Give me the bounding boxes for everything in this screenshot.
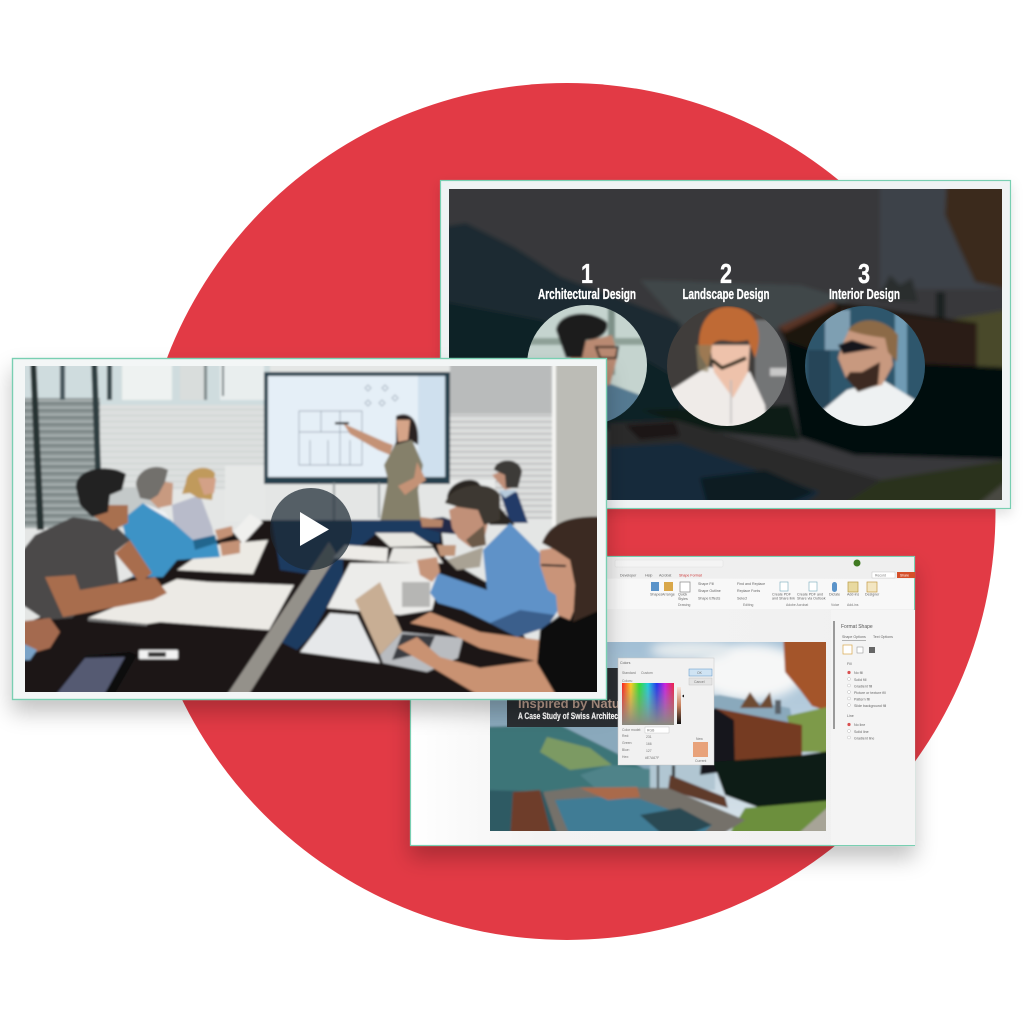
format shape pane: Gradient fill bbox=[854, 684, 872, 688]
number 1 and heading bbox=[538, 258, 636, 303]
format shape pane: Solid line bbox=[854, 730, 869, 734]
conference table bbox=[25, 518, 535, 692]
colors dialog: Red: bbox=[622, 734, 629, 738]
format shape pane: Solid fill bbox=[854, 678, 867, 682]
colors dialog: RGB bbox=[647, 728, 655, 732]
tablet bbox=[56, 652, 136, 692]
ribbon toolbar: Create PDF and bbox=[797, 592, 823, 596]
number 1 and heading: Architectural Design bbox=[538, 286, 636, 303]
panel: dark slide with three design disciplines bbox=[435, 175, 1020, 515]
colors dialog: 166 bbox=[646, 742, 652, 746]
ribbon tabs bbox=[600, 557, 915, 578]
format shape pane: Fill bbox=[847, 662, 852, 666]
man in grey t-shirt bbox=[15, 468, 167, 620]
ribbon tabs: Shape Format bbox=[679, 574, 702, 578]
slide title band: Inspired by Nature bbox=[518, 696, 632, 711]
laptop bbox=[355, 582, 463, 672]
play button bbox=[270, 488, 352, 570]
ribbon toolbar: Designer bbox=[865, 592, 880, 596]
number 2 and heading bbox=[682, 258, 770, 303]
colors dialog: 127 bbox=[646, 749, 652, 753]
ribbon tabs: Share bbox=[900, 574, 909, 578]
ribbon toolbar: Shape Effects bbox=[698, 596, 721, 600]
ribbon toolbar bbox=[600, 579, 914, 609]
ribbon toolbar: Shapes bbox=[650, 592, 662, 596]
darkened slide photo background bbox=[449, 189, 1002, 500]
colors dialog: Color model: bbox=[622, 728, 641, 732]
format shape pane: Line bbox=[847, 714, 854, 718]
woman in black, foreground bbox=[397, 517, 607, 702]
number 3 and heading bbox=[829, 258, 900, 303]
colors dialog: Standard bbox=[622, 671, 636, 675]
slide photo bbox=[490, 642, 826, 831]
format shape pane bbox=[831, 610, 915, 845]
man in blue shirt bbox=[417, 485, 563, 637]
colors dialog: Colors bbox=[620, 661, 631, 665]
ribbon toolbar: Adobe Acrobat bbox=[786, 603, 808, 607]
colors dialog: Current bbox=[695, 759, 706, 763]
blond woman bbox=[172, 468, 233, 540]
format shape pane: Shape Options bbox=[842, 635, 866, 639]
number 3 and heading: Interior Design bbox=[829, 286, 900, 303]
format shape pane: Gradient line bbox=[854, 736, 874, 740]
ribbon toolbar: Editing bbox=[743, 603, 753, 607]
man at far right bbox=[492, 460, 528, 523]
ribbon toolbar: Share via Outlook bbox=[797, 596, 826, 600]
ribbon toolbar: Dictate bbox=[829, 592, 840, 596]
ribbon toolbar: Quick bbox=[678, 592, 687, 596]
ribbon toolbar: Add-ins bbox=[847, 603, 859, 607]
papers on table bbox=[88, 514, 443, 663]
number 1 and heading: 1 bbox=[581, 258, 593, 289]
portrait 3: interior designer bbox=[805, 306, 925, 426]
ribbon toolbar: Drawing bbox=[678, 603, 691, 607]
colour spectrum bbox=[622, 683, 674, 725]
colors dialog: Cancel bbox=[694, 680, 705, 684]
number 2 and heading: Landscape Design bbox=[682, 286, 770, 303]
colors dialog: Colors: bbox=[622, 679, 633, 683]
colors dialog: #E7A67F bbox=[645, 756, 659, 760]
background red circle bbox=[138, 83, 996, 940]
ribbon tabs: Developer bbox=[620, 574, 637, 578]
colors dialog: Green: bbox=[622, 741, 632, 745]
format shape pane: Picture or texture fill bbox=[854, 691, 886, 695]
format shape pane: Pattern fill bbox=[854, 698, 870, 702]
colors dialog: OK bbox=[697, 671, 703, 675]
colors dialog: 231 bbox=[646, 735, 652, 739]
format shape pane: No line bbox=[854, 723, 865, 727]
panel: video of meeting room bbox=[12, 356, 607, 702]
colors dialog bbox=[618, 658, 714, 765]
format shape pane: No fill bbox=[854, 671, 863, 675]
presentation screen bbox=[264, 372, 450, 523]
ribbon toolbar: Add-ins bbox=[847, 592, 859, 596]
ribbon toolbar: Shape Fill bbox=[698, 582, 714, 586]
format shape pane: Text Options bbox=[873, 635, 893, 639]
ribbon toolbar: Create PDF bbox=[772, 592, 792, 596]
presenter bbox=[335, 414, 426, 522]
panel: PowerPoint editing window bbox=[410, 556, 915, 846]
format shape pane: Format Shape bbox=[841, 624, 873, 630]
ribbon toolbar: Shape Outline bbox=[698, 589, 721, 593]
colors dialog: Custom bbox=[641, 671, 653, 675]
seated person's hand, lower left bbox=[25, 616, 62, 662]
ribbon toolbar: Styles bbox=[678, 597, 688, 601]
format shape pane: Slide background fill bbox=[854, 704, 886, 708]
ribbon tabs: Record bbox=[875, 574, 886, 578]
ribbon toolbar: Find and Replace bbox=[737, 582, 765, 586]
ribbon toolbar: Select bbox=[737, 596, 747, 600]
ribbon toolbar: Arrange bbox=[662, 592, 675, 596]
slide title band bbox=[507, 668, 632, 727]
woman behind blue shirt man bbox=[420, 480, 515, 570]
ribbon toolbar: and Share link bbox=[772, 596, 795, 600]
colors dialog: Hex: bbox=[622, 755, 629, 759]
portrait 2: landscape designer bbox=[667, 306, 787, 426]
ribbon tabs: Acrobat bbox=[659, 574, 671, 578]
portrait 1: architect bbox=[528, 305, 647, 422]
colors dialog: Blue: bbox=[622, 748, 630, 752]
slide title band: A Case Study of Swiss Architec bbox=[518, 711, 618, 722]
colors dialog: New bbox=[696, 737, 703, 741]
number 3 and heading: 3 bbox=[858, 258, 870, 289]
ribbon toolbar: Voice bbox=[831, 603, 839, 607]
room walls bbox=[25, 366, 597, 642]
ribbon tabs: Help bbox=[645, 574, 652, 578]
ribbon toolbar: Replace Fonts bbox=[737, 589, 760, 593]
number 2 and heading: 2 bbox=[720, 258, 732, 289]
table centre inlay bbox=[222, 520, 440, 702]
man in blue sweater bbox=[122, 467, 240, 577]
meeting room photo bbox=[15, 356, 607, 702]
